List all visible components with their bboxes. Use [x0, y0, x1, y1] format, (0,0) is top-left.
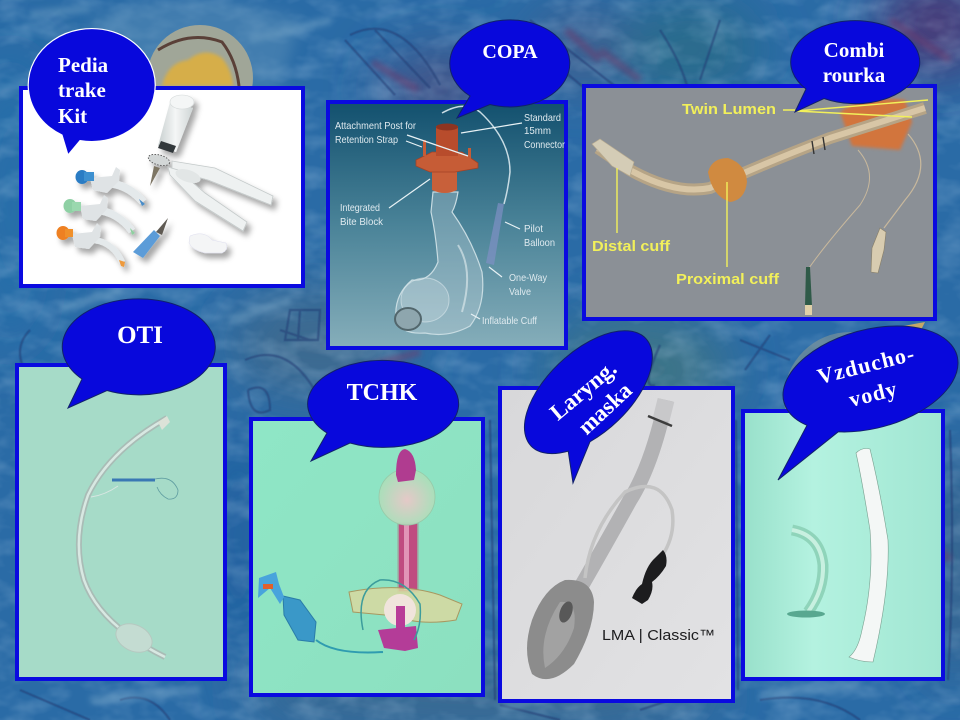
photo frame [17, 365, 225, 679]
labels: Bite Block [340, 216, 384, 228]
decorative plate lower right [784, 322, 925, 464]
device: white obturator piece [189, 234, 227, 253]
device: blue scalpel [133, 218, 168, 258]
device: blue tracheostomy tube [76, 167, 145, 206]
device: endotracheal tube [79, 416, 178, 658]
labels: Balloon [524, 237, 555, 249]
speech bubble: OTI [62, 299, 215, 408]
panel: Vzduchovody [743, 411, 943, 679]
labels: Distal cuff [592, 238, 671, 255]
labels: Integrated [340, 202, 380, 214]
speech bubble: Combi rourka: Combi [824, 38, 884, 62]
device: syringe and dilating forceps [147, 95, 273, 231]
photo frame [584, 86, 935, 319]
photo frame [328, 102, 566, 348]
panel: OTI [17, 365, 225, 679]
device: orange tracheostomy tube [56, 223, 125, 267]
callout leaders [389, 123, 522, 319]
speech bubble: Vzducho-vody: vody [846, 376, 900, 412]
labels: Retention Strap [335, 134, 398, 146]
device: green tracheostomy tube [64, 195, 135, 235]
speech bubble: Combi rourka [791, 21, 920, 112]
speech bubble: Pedia trake Kit: trake [58, 78, 106, 102]
speech bubble: OTI: OTI [117, 322, 163, 349]
photo frame [743, 411, 943, 679]
device: tracheostomy cannula [258, 449, 462, 652]
labels: Inflatable Cuff [482, 315, 537, 327]
panel: Laryngeal mask [500, 388, 733, 701]
photo frame [21, 88, 303, 286]
speech bubble: Pedia trake Kit: Pedia [58, 53, 109, 77]
device: laryngeal mask airway [527, 400, 673, 679]
photo frame [251, 419, 483, 695]
labels: Attachment Post for [335, 120, 416, 132]
panel: Pedia trake Kit [21, 88, 303, 286]
panel: Combi rourka [584, 86, 935, 319]
speech bubble: TCHK: TCHK [347, 380, 418, 406]
labels: Valve [509, 286, 531, 298]
speech bubble: Laryng. maska: maska [573, 377, 637, 439]
labels: Connector [524, 139, 565, 151]
speech bubble: COPA: COPA [482, 41, 538, 63]
device: cuffed oropharyngeal airway [395, 106, 510, 334]
labels: Standard [524, 112, 561, 124]
labels [335, 112, 565, 327]
callout leaders [617, 100, 928, 267]
photo frame [500, 388, 733, 701]
brand label: LMA | Classic™ [602, 627, 715, 644]
panel: TCHK [251, 419, 483, 695]
speech bubble: Pedia trake Kit [28, 29, 155, 155]
decorative plate top left [90, 0, 300, 131]
speech bubble: TCHK [308, 360, 459, 461]
device: oropharyngeal airway [787, 530, 825, 618]
speech bubble: Pedia trake Kit: Kit [58, 104, 87, 128]
panel: COPA [328, 102, 566, 348]
speech bubble: Laryng. maska: Laryng. [545, 355, 621, 425]
labels: Pilot [524, 223, 543, 235]
device: combitube [592, 99, 925, 315]
labels: Twin Lumen [682, 101, 776, 118]
device: nasopharyngeal airway [849, 448, 888, 662]
speech bubble: Laryng. maska [524, 331, 652, 483]
labels: 15mm [524, 125, 551, 137]
labels: One-Way [509, 272, 548, 284]
speech bubble: Vzducho-vody: Vzducho- [815, 340, 918, 389]
speech bubble: COPA [450, 20, 570, 118]
labels: Proximal cuff [676, 271, 780, 288]
speech bubble: Combi rourka: rourka [823, 63, 886, 87]
speech bubble: Vzducho-vody [778, 326, 958, 480]
labels [592, 101, 780, 288]
